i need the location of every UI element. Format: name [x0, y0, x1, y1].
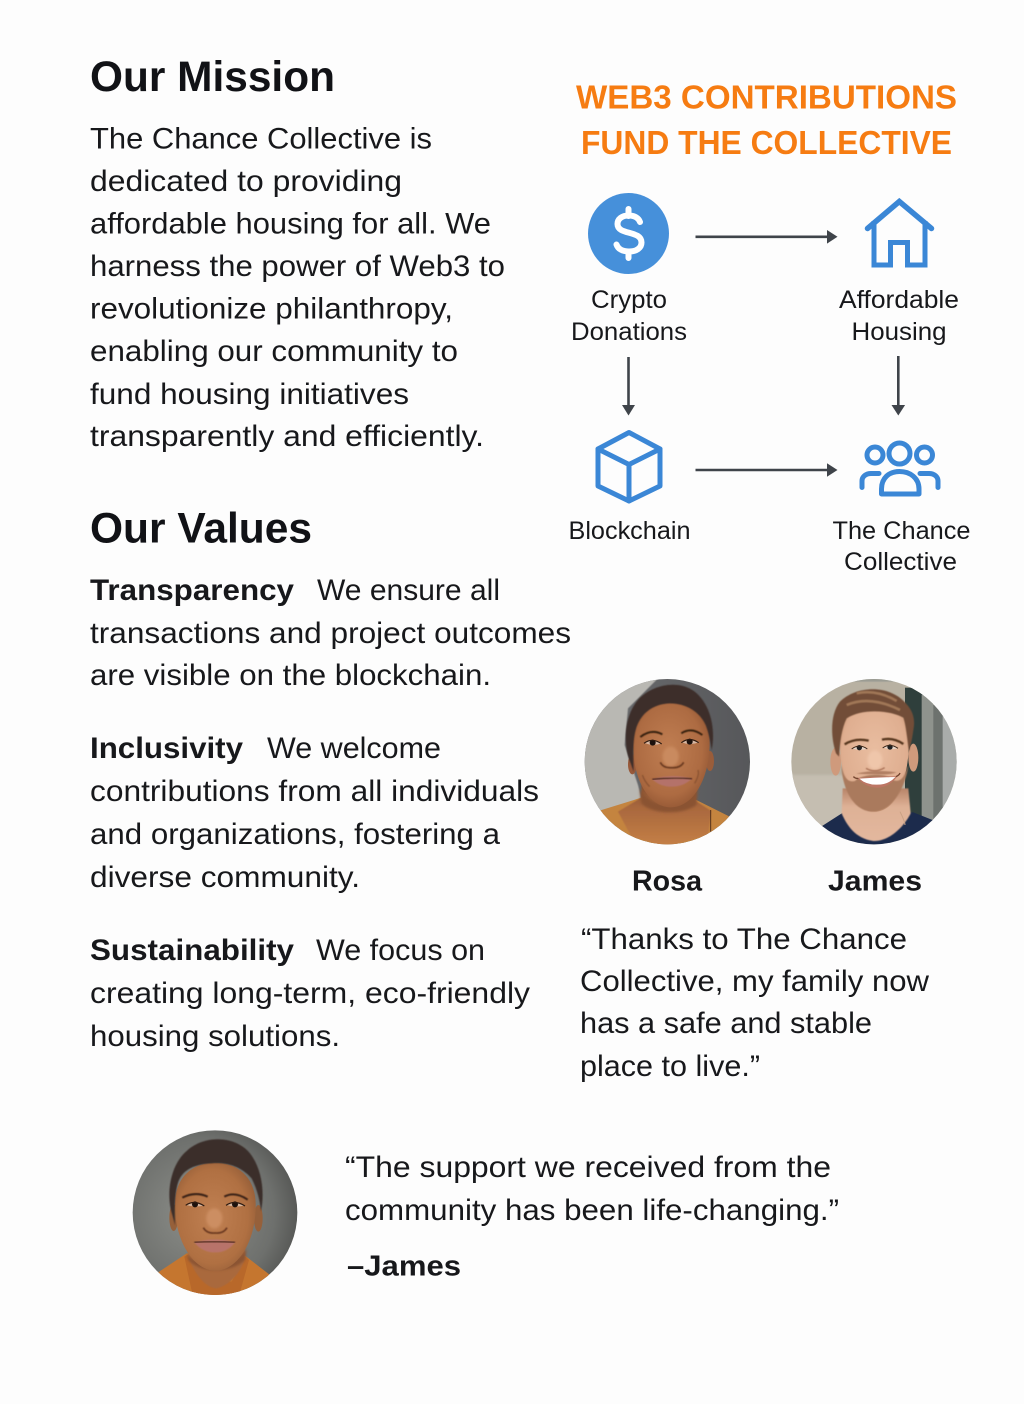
- mission text block: revolutionize philanthropy,: [90, 292, 453, 326]
- icon: community people: [862, 443, 938, 494]
- photo: bottom portrait: [132, 1130, 298, 1298]
- label: affordable housing: [839, 286, 959, 346]
- mission text block: [90, 122, 505, 453]
- label: affordable housing: Affordable: [839, 286, 959, 314]
- testimonial quote: james: [345, 1151, 839, 1282]
- value: inclusivity: Inclusivity: [90, 732, 243, 765]
- label: the chance collective: The Chance: [832, 517, 970, 545]
- photo: james portrait: [790, 675, 960, 848]
- panel: our mission: [90, 53, 505, 453]
- arrow: donations to housing: [696, 230, 838, 244]
- arrow: blockchain to collective: [696, 463, 838, 477]
- arrow: housing to collective: [892, 356, 905, 416]
- icon: crypto dollar coin: [588, 193, 669, 274]
- value: transparency: [90, 574, 571, 692]
- value: inclusivity: and organizations, fostering a: [90, 818, 500, 851]
- testimonial quote: rosa: [580, 923, 929, 1083]
- testimonial quote: james: community has been life-changing.”: [345, 1194, 839, 1227]
- diagram title: [576, 80, 957, 162]
- testimonial quote: rosa: place to live.”: [580, 1050, 760, 1083]
- value: transparency: transactions and project outcomes: [90, 617, 571, 650]
- arrow: donations to blockchain: [622, 357, 635, 416]
- value: transparency: are visible on the blockchain.: [90, 659, 491, 692]
- value: inclusivity: [90, 732, 539, 894]
- value: inclusivity: We welcome: [267, 732, 441, 765]
- mission text block: dedicated to providing: [90, 165, 402, 198]
- label: blockchain: Blockchain: [568, 517, 690, 545]
- value: sustainability: housing solutions.: [90, 1020, 340, 1053]
- label: affordable housing: Housing: [852, 318, 946, 346]
- label: crypto donations: Crypto: [591, 286, 667, 314]
- diagram title: WEB3 CONTRIBUTIONS: [576, 80, 957, 116]
- photo: rosa portrait: [583, 675, 753, 848]
- testimonial quote: james: “The support we received from the: [345, 1151, 831, 1184]
- value: sustainability: Sustainability: [90, 934, 294, 967]
- value: transparency: We ensure all: [317, 574, 500, 607]
- label: crypto donations: [571, 286, 687, 346]
- label: crypto donations: Donations: [571, 318, 687, 346]
- mission text block: transparently and efficiently.: [90, 420, 484, 453]
- mission text block: enabling our community to: [90, 335, 458, 368]
- value: sustainability: We focus on: [316, 934, 485, 967]
- panel: our values: [90, 504, 571, 1053]
- value: sustainability: [90, 934, 530, 1053]
- testimonial quote: rosa: has a safe and stable: [580, 1007, 872, 1040]
- value: sustainability: creating long-term, eco-friendly: [90, 977, 530, 1010]
- value: inclusivity: contributions from all individuals: [90, 775, 539, 808]
- mission text block: The Chance Collective is: [90, 122, 432, 156]
- attribution: –James: [347, 1250, 461, 1282]
- label: the chance collective: [832, 517, 970, 576]
- mission text block: harness the power of Web3 to: [90, 250, 505, 283]
- label: the chance collective: Collective: [844, 548, 957, 576]
- value: transparency: Transparency: [90, 574, 294, 607]
- value: inclusivity: diverse community.: [90, 861, 360, 894]
- mission text block: fund housing initiatives: [90, 378, 409, 411]
- icon: blockchain cube: [598, 432, 660, 501]
- diagram title: FUND THE COLLECTIVE: [581, 125, 952, 162]
- name: james: James: [828, 866, 922, 898]
- name: rosa: Rosa: [632, 866, 703, 898]
- flow diagram panel: [568, 80, 970, 576]
- mission text block: affordable housing for all. We: [90, 208, 491, 240]
- heading: our mission: Our Mission: [90, 53, 335, 101]
- testimonial quote: rosa: Collective, my family now: [580, 965, 929, 998]
- testimonial quote: rosa: “Thanks to The Chance: [581, 923, 907, 956]
- heading: our values: Our Values: [90, 504, 312, 552]
- icon: house: [868, 202, 932, 265]
